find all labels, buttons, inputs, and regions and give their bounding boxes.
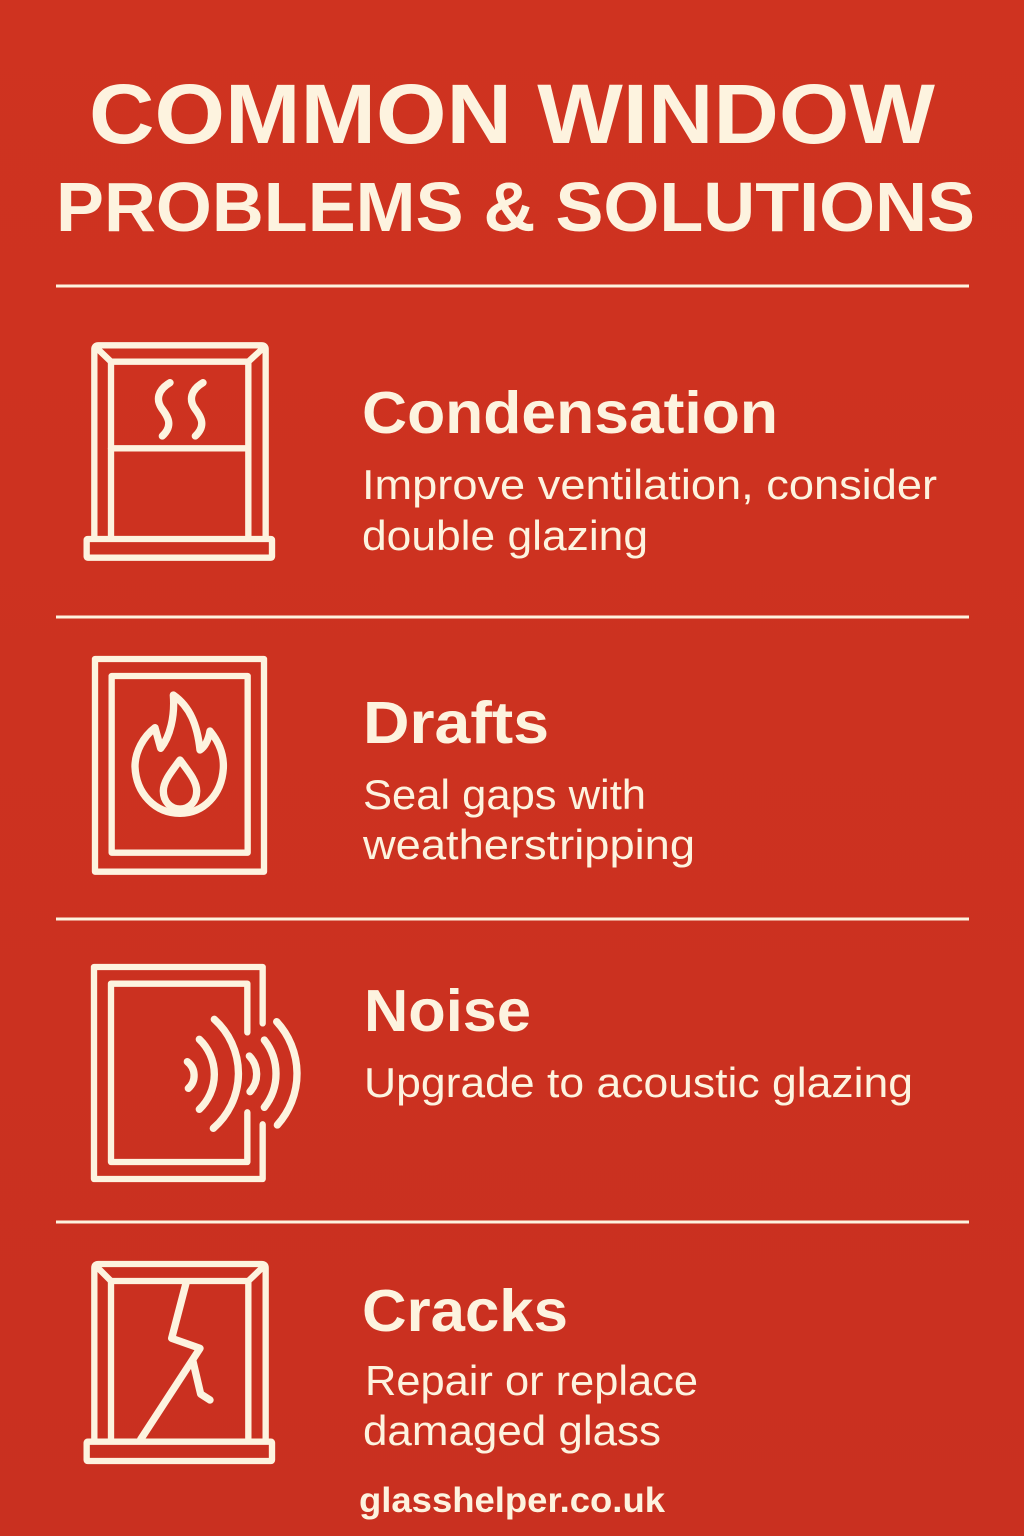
text: drafts solution: weatherstripping	[362, 821, 695, 868]
heading: cracks: Cracks	[362, 1278, 568, 1344]
text: cracks solution	[363, 1357, 698, 1454]
panel: cracks	[87, 1264, 698, 1461]
text: noise solution: Upgrade to acoustic glazing	[364, 1059, 913, 1106]
text: condensation solution: double glazing	[362, 512, 648, 559]
heading: noise: Noise	[364, 978, 531, 1044]
heading: condensation: Condensation	[362, 380, 778, 446]
icon: window with condensation	[87, 345, 272, 558]
panel: noise	[94, 967, 913, 1179]
text: cracks solution: Repair or replace	[365, 1357, 698, 1404]
icon: window with sound waves	[94, 967, 297, 1179]
heading: drafts: Drafts	[363, 690, 549, 756]
title: COMMON WINDOW	[89, 67, 936, 161]
title	[56, 67, 975, 246]
text: drafts solution	[362, 771, 695, 868]
panel: condensation	[87, 345, 937, 559]
title: PROBLEMS & SOLUTIONS	[56, 168, 975, 246]
text: condensation solution: Improve ventilation, consider	[362, 461, 937, 508]
text: condensation solution	[362, 461, 937, 559]
text: drafts solution: Seal gaps with	[363, 771, 646, 818]
footer url: glasshelper.co.uk	[359, 1481, 666, 1520]
text: cracks solution: damaged glass	[363, 1407, 661, 1454]
icon: window with flame	[95, 659, 264, 872]
panel: drafts	[95, 659, 695, 872]
icon: cracked window	[87, 1264, 272, 1461]
